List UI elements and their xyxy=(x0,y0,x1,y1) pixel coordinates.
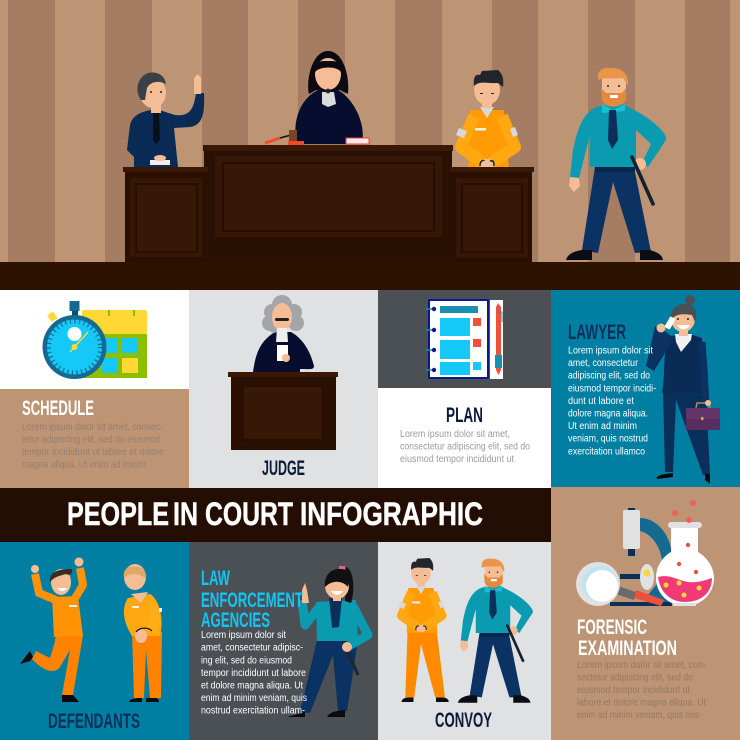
panel: defendants xyxy=(0,542,189,740)
heading: JUDGE xyxy=(262,457,305,480)
text block: tempor incididunt ut labore et dolore xyxy=(22,447,164,458)
panel: convoy xyxy=(378,542,551,740)
striped wall xyxy=(0,0,740,262)
panel: schedule xyxy=(0,290,189,488)
gavel xyxy=(265,130,304,145)
heading xyxy=(201,567,303,632)
text block xyxy=(400,429,530,465)
prisoner in dock xyxy=(456,70,524,262)
heading: SCHEDULE xyxy=(22,397,94,420)
text block: Lorem ipsum dolor sit xyxy=(201,630,286,641)
title: IN xyxy=(173,496,198,532)
text block: nostrud exercitation ullam- xyxy=(201,706,305,716)
panel: law enforcement agencies xyxy=(189,542,378,740)
text block xyxy=(201,630,307,716)
text block: eiusmod tempor incididunt ut xyxy=(577,685,690,696)
guard figure xyxy=(458,559,533,703)
panel: judge xyxy=(189,290,378,488)
officer figure xyxy=(287,566,368,717)
text block xyxy=(568,346,656,457)
heading: FORENSIC xyxy=(577,616,647,639)
judge with wig xyxy=(253,295,314,372)
title banner xyxy=(0,488,551,542)
prisoner figure xyxy=(398,558,449,702)
title xyxy=(67,496,483,532)
text block: amet, consectetur adipisc- xyxy=(201,643,303,654)
heading: LAW xyxy=(201,567,230,590)
text block: labore et dolore magna aliqua. Ut xyxy=(577,698,706,708)
witness figure xyxy=(127,73,204,167)
judge figure xyxy=(295,51,363,144)
text block: tetur adipiscing elit, sed do eiusmod xyxy=(22,434,160,446)
text block: magna aliqua. Ut enim ad minim xyxy=(22,460,146,470)
text block: Ut enim ad minim xyxy=(568,421,637,432)
heading: EXAMINATION xyxy=(578,637,677,660)
center bench xyxy=(203,145,453,262)
text block: tempor incididunt ut labore xyxy=(201,668,306,679)
witness stand xyxy=(123,167,208,262)
heading xyxy=(577,616,677,660)
text block: Lorem ipsum dolor sit amet, consec- xyxy=(22,422,163,433)
defendant jumping xyxy=(20,558,84,702)
title: PEOPLE xyxy=(67,496,169,532)
text block: enim ad minim veniam, quis nos- xyxy=(577,710,702,721)
text block: exercitation ullamco xyxy=(568,446,645,457)
text block: sectetur adipiscing elit, sed do xyxy=(577,672,693,684)
panel: plan xyxy=(378,290,551,488)
floor xyxy=(0,262,740,290)
text block: dunt ut labore et xyxy=(568,396,634,407)
text block: veniam, quis nostrud xyxy=(568,434,648,445)
panel: forensic examination xyxy=(551,487,740,740)
icon: microscope, magnifier and flask xyxy=(576,500,714,606)
bench xyxy=(228,372,338,450)
text block: eiusmod tempor incididunt ut xyxy=(400,454,514,465)
text block: amet, consectetur xyxy=(568,358,639,369)
heading: LAWYER xyxy=(568,321,626,344)
text block xyxy=(577,660,706,721)
text block: Lorem ipsum dolor sit amet, con- xyxy=(577,660,706,671)
heading: CONVOY xyxy=(435,709,492,732)
lawyer figure xyxy=(646,295,720,484)
heading: PLAN xyxy=(446,404,483,427)
heading: AGENCIES xyxy=(201,609,270,632)
title: COURT xyxy=(205,496,293,532)
courtroom scene xyxy=(0,0,740,290)
text block: dolore magna aliqua. xyxy=(568,408,648,420)
text block: enim ad minim veniam, quis xyxy=(201,693,307,704)
text block: ing elit, sed do eiusmod xyxy=(201,655,292,666)
text block: consectetur adipiscing elit, sed do xyxy=(400,442,530,452)
title: INFOGRAPHIC xyxy=(300,496,483,532)
book xyxy=(346,138,369,144)
heading: DEFENDANTS xyxy=(48,710,140,733)
heading: ENFORCEMENT xyxy=(201,589,303,612)
panel: lawyer xyxy=(551,290,740,487)
defendant stand xyxy=(450,167,534,262)
icon: calendar and stopwatch xyxy=(42,301,147,379)
guard figure xyxy=(566,68,666,260)
text block: Lorem ipsum dolor sit amet, xyxy=(400,429,510,440)
text block: adipiscing elit, sed do xyxy=(568,371,650,382)
text block: eiusmod tempor incidi- xyxy=(568,383,656,394)
text block xyxy=(22,422,164,470)
text block: Lorem ipsum dolor sit xyxy=(568,346,653,356)
icon: notebook and pen xyxy=(426,300,503,379)
defendant handcuffed xyxy=(124,564,162,702)
text block: et dolore magna aliqua. Ut xyxy=(201,680,303,692)
briefcase xyxy=(686,400,720,430)
